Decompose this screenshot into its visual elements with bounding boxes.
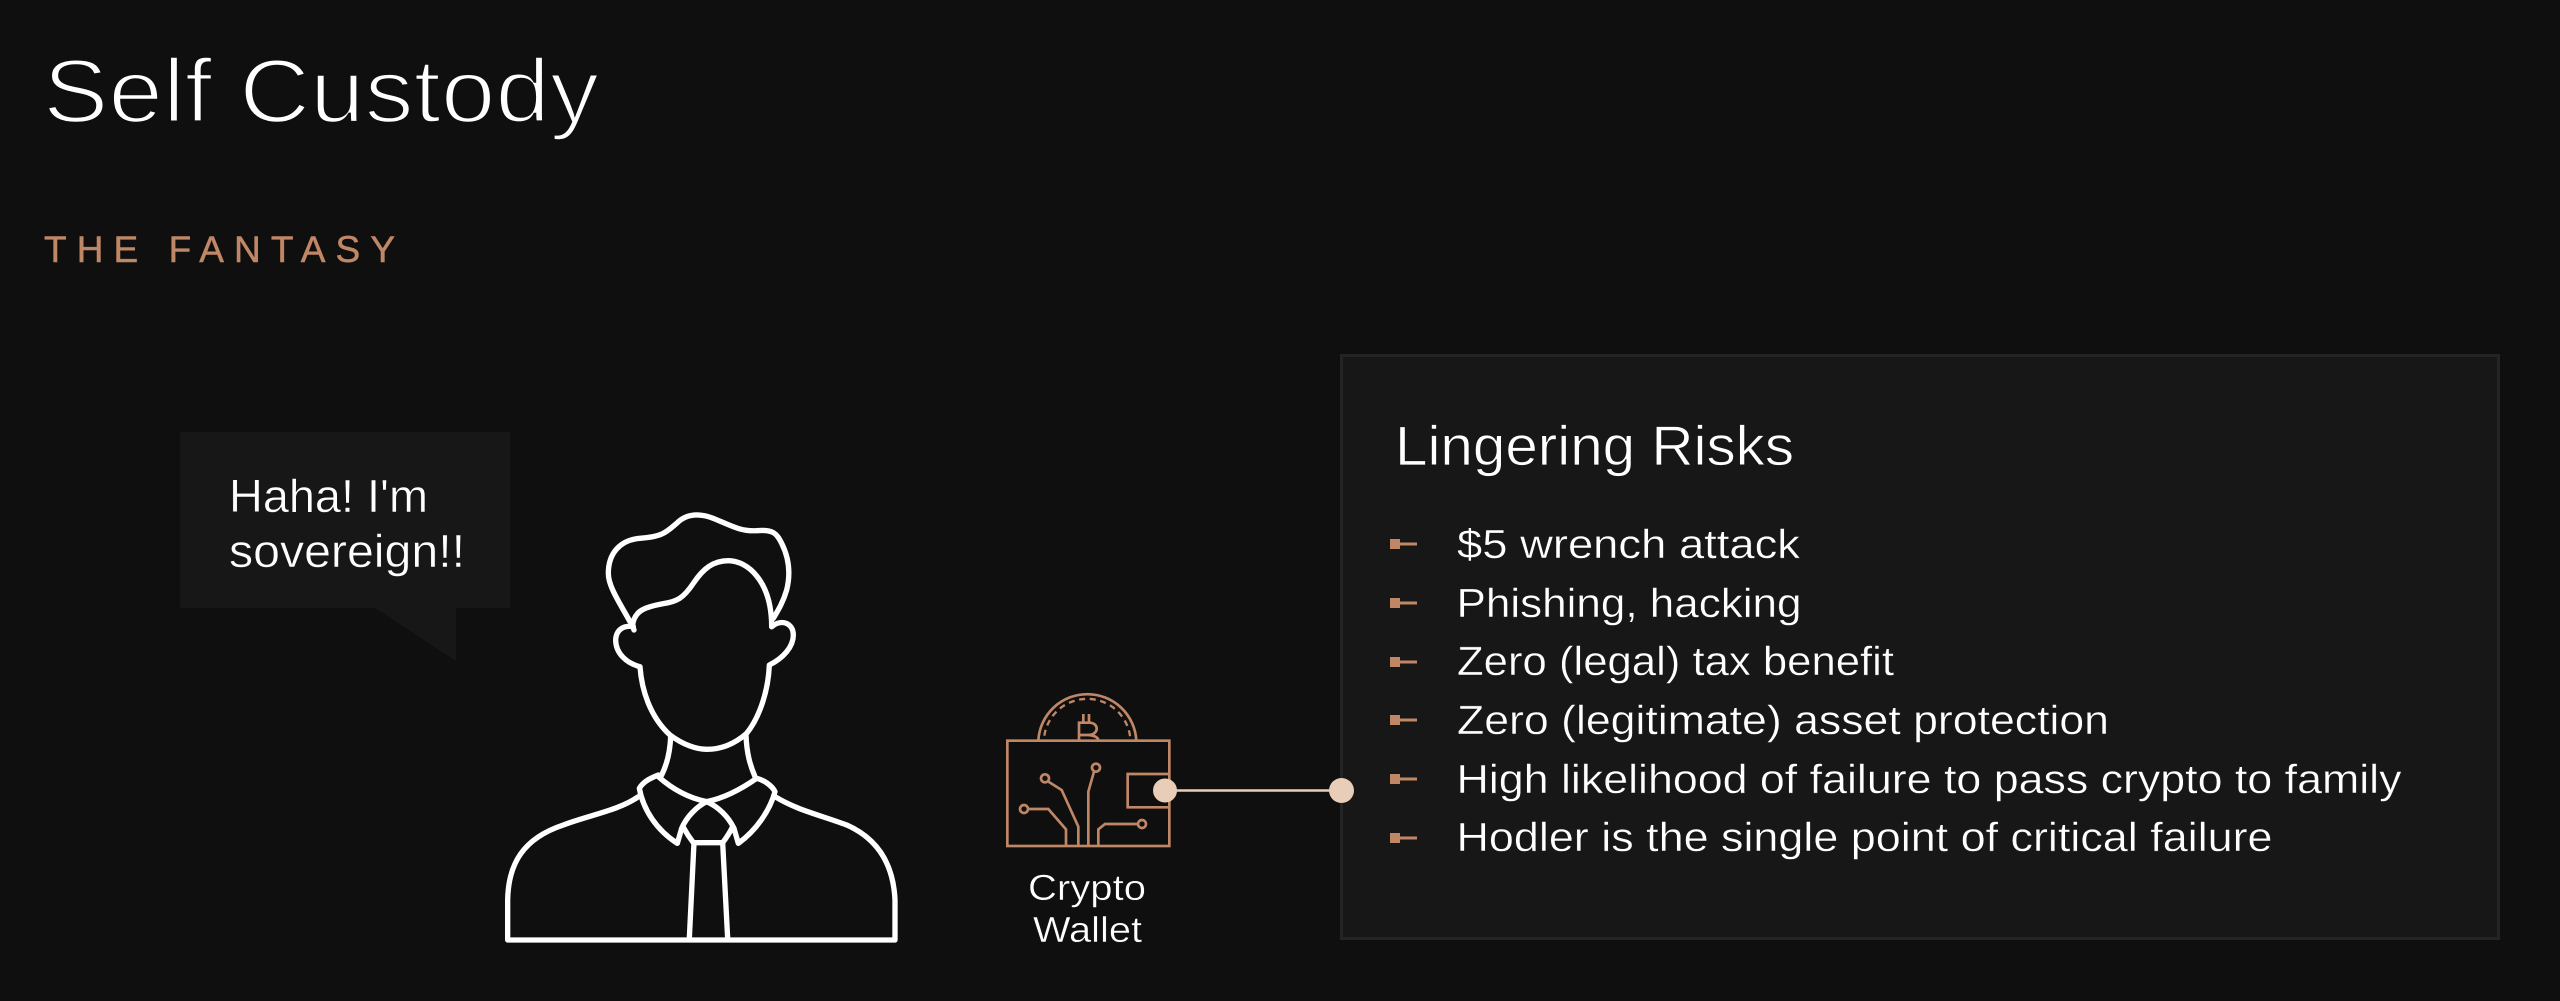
risk 6: Hodler is the single point of critical failure xyxy=(1456,814,2272,860)
panel heading: Lingering Risks xyxy=(1395,414,1794,477)
icon: person in suit and tie xyxy=(508,515,895,940)
bubble text: Haha! I'm xyxy=(229,470,428,522)
bubble shape xyxy=(180,432,510,661)
connector: wallet to risks panel xyxy=(1153,778,1354,803)
wallet label xyxy=(1028,867,1146,950)
risk 3: Zero (legal) tax benefit xyxy=(1457,638,1895,684)
wallet label: Wallet xyxy=(1033,909,1142,950)
panel background xyxy=(1342,356,2498,938)
icon: crypto wallet xyxy=(1007,694,1169,846)
risk 4: Zero (legitimate) asset protection xyxy=(1457,697,2109,743)
risk 1: $5 wrench attack xyxy=(1457,521,1801,567)
bubble text: sovereign!! xyxy=(229,525,465,577)
risk 2: Phishing, hacking xyxy=(1456,580,1802,626)
panel: lingering risks xyxy=(1342,356,2498,938)
subtitle: the fantasy: THE FANTASY xyxy=(44,229,395,270)
title: Self Custody xyxy=(43,42,599,142)
speech bubble xyxy=(180,432,510,661)
wallet label: Crypto xyxy=(1028,867,1146,908)
bubble text xyxy=(229,470,465,577)
risk 5: High likelihood of failure to pass crypto to family xyxy=(1456,756,2402,802)
